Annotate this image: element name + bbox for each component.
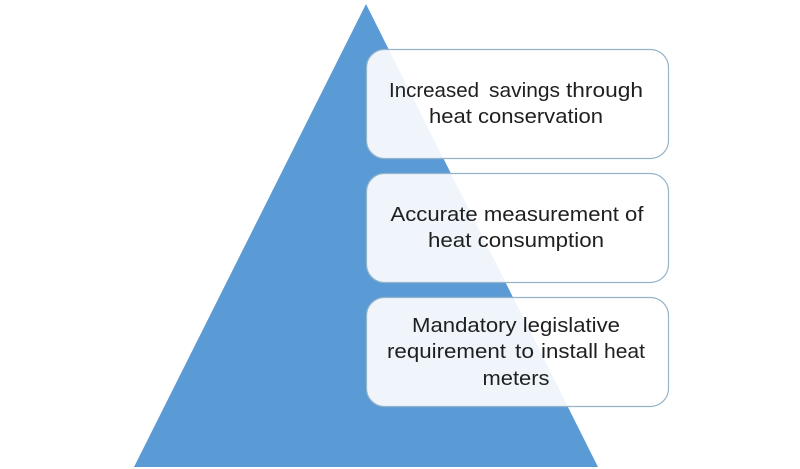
card: increased savings: heat conservation [429, 105, 603, 128]
card: increased savings [366, 50, 668, 158]
card: increased savings: savings [489, 79, 560, 102]
card: increased savings: Increased [389, 79, 479, 102]
card: accurate measurement [366, 174, 668, 282]
card: mandatory requirement: to [515, 340, 534, 363]
card: increased savings: through [566, 79, 643, 102]
card: mandatory requirement: meters [482, 367, 550, 390]
card: accurate measurement: heat consumption [428, 229, 604, 252]
card: mandatory requirement: Mandatory legislative [412, 314, 620, 337]
card: mandatory requirement: heat [604, 340, 645, 363]
card: mandatory requirement [366, 298, 668, 406]
card: mandatory requirement: install [541, 340, 598, 363]
card: accurate measurement: Accurate measurement of [390, 203, 644, 226]
pyramid triangle [134, 4, 598, 467]
card: mandatory requirement: requirement [387, 340, 506, 363]
